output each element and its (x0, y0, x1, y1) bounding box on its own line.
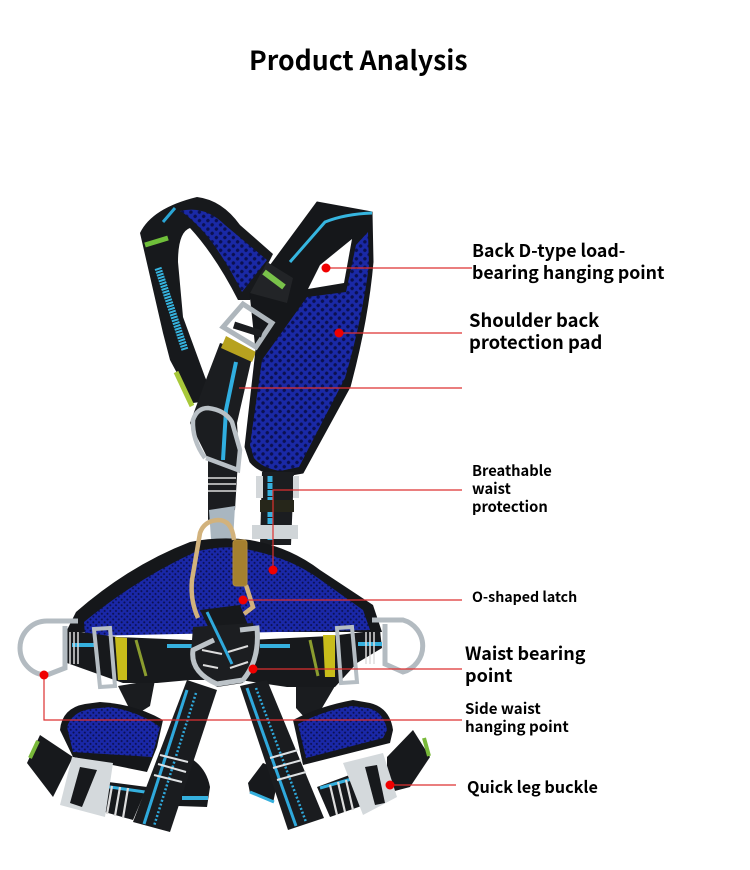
D-ring chest (193, 408, 240, 470)
waist protection pad (66, 538, 382, 636)
front thigh straps (133, 680, 324, 832)
label: back D-type hanging point: Back D-type load- (472, 237, 625, 263)
carabiner (192, 520, 253, 618)
leader lines (44, 268, 472, 785)
label: back D-type hanging point: bearing hanging point (472, 259, 664, 285)
label: waist bearing point (465, 640, 586, 688)
label: O-shaped latch: O-shaped latch (472, 587, 577, 607)
label: shoulder back pad: Shoulder back (469, 307, 599, 333)
side rings (20, 620, 423, 675)
label: breathable waist protection: Breathable (472, 460, 552, 481)
leg buckles (60, 753, 397, 817)
label: waist bearing point: Waist bearing (465, 640, 586, 666)
label: quick leg buckle: Quick leg buckle (467, 774, 598, 798)
central strap (190, 336, 256, 541)
waist belt (67, 627, 382, 687)
label: breathable waist protection: protection (472, 496, 548, 517)
hole in pad (308, 239, 352, 289)
label: side waist hanging point (465, 697, 569, 737)
label: side waist hanging point: Side waist (465, 697, 541, 719)
label: shoulder back pad (469, 307, 602, 355)
callout dots (40, 264, 394, 790)
title: Product Analysis (249, 39, 468, 78)
label: shoulder back pad: protection pad (469, 329, 602, 355)
right shoulder strap and protection pad (245, 202, 373, 477)
label: breathable waist protection (472, 460, 552, 517)
label: side waist hanging point: hanging point (465, 715, 569, 737)
label: back D-type hanging point (472, 237, 664, 285)
leg straps (27, 730, 430, 820)
label: waist bearing point: point (465, 662, 512, 688)
left shoulder strap (140, 197, 273, 406)
center waist D-ring (190, 605, 260, 687)
leg pads (60, 700, 393, 772)
label: breathable waist protection: waist (472, 478, 511, 499)
chest buckle (223, 304, 272, 347)
lower right strap (252, 472, 299, 545)
belt to leg connectors (118, 680, 335, 718)
